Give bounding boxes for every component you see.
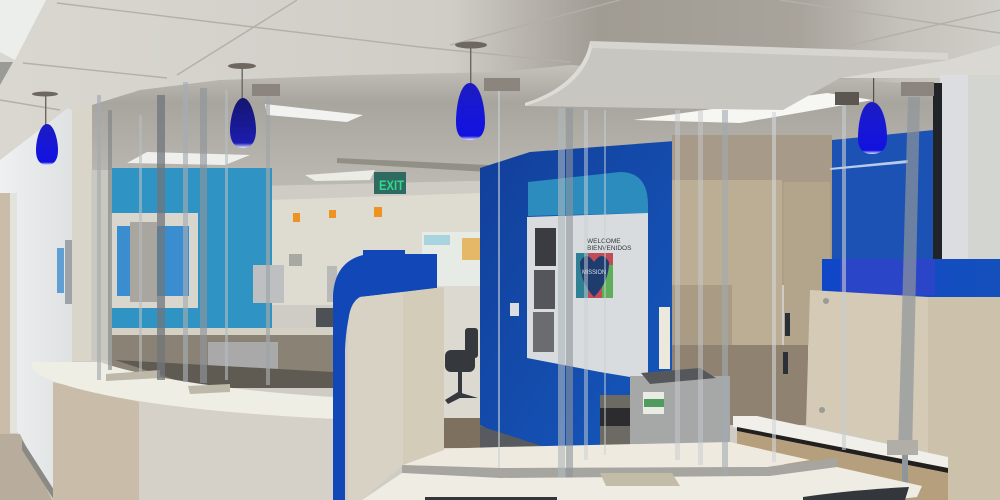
wall base: [480, 426, 548, 448]
wall posters: [57, 240, 72, 304]
glass modesty panel: [806, 290, 928, 452]
soffit: [337, 158, 488, 172]
framed notice on teal wall: [110, 213, 198, 308]
pendant lamp 4: [858, 78, 887, 154]
light reflection: [830, 160, 908, 170]
printed notices on glass: [253, 254, 337, 303]
thermostat: [510, 303, 519, 316]
middle counter edge: [402, 458, 837, 478]
glass base brackets: [106, 370, 230, 394]
rainbow poster: MISSION: [582, 270, 606, 276]
pendant lamp 1: [32, 92, 58, 165]
near counter: [362, 467, 922, 500]
wood cabinets: [672, 135, 832, 425]
board subheading: BIENVENIDOS: [587, 245, 632, 252]
office floor: [444, 418, 496, 448]
right wood panel: [928, 297, 1000, 500]
chair back: [803, 487, 909, 500]
board photographs: [533, 228, 556, 352]
left glass side panel: [92, 170, 112, 360]
ceiling lights behind glass: [127, 93, 873, 181]
blue band: [822, 259, 1000, 300]
hallway floor: [0, 434, 52, 500]
panel fasteners: [819, 298, 829, 413]
transaction tray: [600, 473, 680, 486]
board heading: WELCOME: [587, 238, 621, 245]
exit sign: EXIT: [379, 177, 404, 193]
glass posts right: [842, 97, 920, 485]
pendant lamp 2: [228, 63, 256, 148]
right pillar: [933, 75, 1000, 265]
cabinet locks: [783, 313, 790, 374]
blue divider: [333, 250, 437, 500]
white wall edge strip: [659, 307, 670, 369]
rainbow poster: [576, 253, 613, 298]
whiteboard: [422, 232, 481, 286]
inner ceiling behind glass: [92, 65, 940, 190]
back counter and equipment: [112, 308, 334, 388]
left reception counter front light: [139, 402, 333, 500]
far office wall: [272, 193, 480, 305]
chair back left: [425, 497, 557, 500]
middle counter behind glass: [402, 442, 810, 468]
left reception counter front wood: [53, 382, 139, 500]
ceiling: [0, 0, 1000, 170]
ceiling cloud panel: [525, 41, 948, 110]
notice board: [527, 172, 648, 380]
left white wall: [0, 108, 72, 500]
glass posts left: [97, 82, 270, 385]
blue office wall: [480, 141, 675, 450]
trash can: [600, 395, 630, 448]
left door frame: [0, 193, 17, 434]
office room behind divider: [444, 286, 481, 418]
orange pendant lights: [293, 207, 382, 222]
recycling bin and cabinet: [630, 368, 730, 447]
wood divider panel front: [348, 292, 403, 500]
pendant lamp 3: [455, 42, 487, 140]
glass mounting brackets: [252, 78, 934, 455]
teal back wall: [112, 168, 272, 336]
wall baseboard: [22, 440, 54, 500]
right blue wall: [832, 130, 934, 262]
wall column: [72, 108, 91, 361]
glass posts middle: [498, 90, 776, 488]
office chair: [445, 328, 478, 404]
wood divider panel side: [403, 287, 444, 465]
right ledge: [733, 416, 948, 500]
exit sign: [374, 172, 406, 194]
left reception counter top: [32, 362, 333, 419]
